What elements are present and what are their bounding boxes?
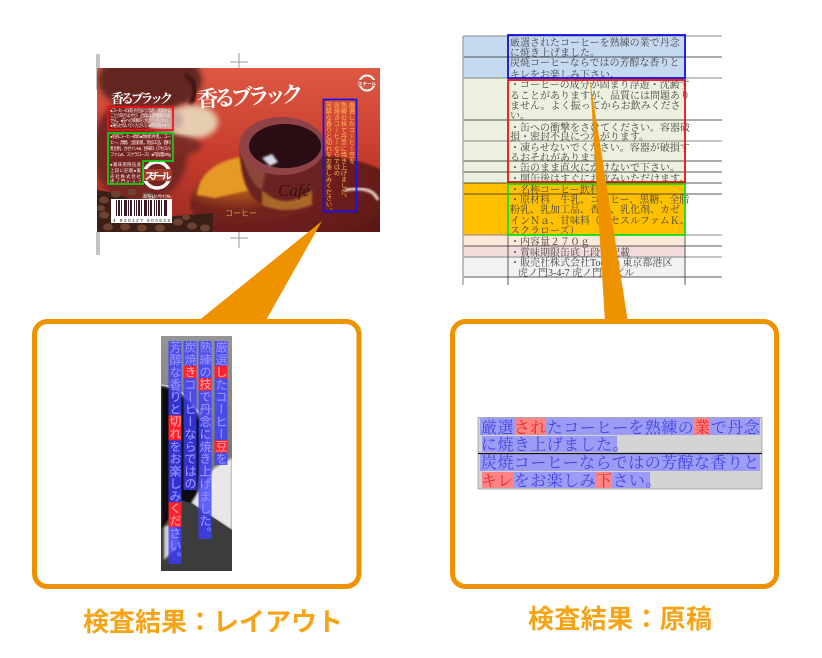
ingredients small text: ●名称コーヒー飲料●原材料 牛乳、コー: [110, 133, 171, 140]
table text: スクラローズ）: [510, 225, 580, 237]
vertical catch copy: 厳選したコーヒー豆を: [348, 101, 355, 164]
vertical catch copy: 熟練の技で丹念に焼き上げました。: [340, 101, 347, 201]
table text: ・賞味期限缶底上段に記載: [510, 246, 630, 259]
table text: ・コーヒーの成分が固まり浮遊・沈澱す: [510, 78, 690, 91]
caution small text: ●コーヒーの成分が固まり浮遊・沈澱する: [110, 107, 171, 114]
inspected text lines: [481, 419, 761, 490]
vertical inspected text: 炭焼 き コーヒーならではの: [183, 340, 197, 490]
inspected text lines: に焼き上げました。: [481, 436, 629, 454]
detection box: green: [108, 133, 173, 184]
panel: manuscript table: [463, 35, 722, 285]
table text: 損・密封不良につながります。: [510, 130, 649, 143]
arrow: callout wedge to manuscript result: [590, 80, 628, 322]
blue match highlights: [168, 341, 228, 564]
red mismatch highlights: [482, 418, 710, 488]
table text: ・販売社株式会社Toopan 東京都港区: [510, 256, 672, 269]
table text: ・名称コーヒー飲料: [510, 183, 600, 196]
table text: ることがありますが、品質には問題あり: [510, 90, 690, 102]
table text: ・内容量２７０ｇ: [510, 235, 590, 248]
table text: ません。よく振ってからお飲みくださ: [510, 99, 681, 112]
table text: ・凍らせないでください。容器が破損す: [510, 141, 690, 154]
grayscale cropped photo: [161, 336, 232, 571]
inspected text lines: キレをお楽しみ下さい。: [481, 472, 662, 490]
caution small text: せん。●缶への衝撃をさけてください。: [110, 117, 171, 124]
panel: package label artwork: [96, 53, 380, 255]
vertical catch copy: [324, 101, 355, 214]
table text: に焼き上げました。: [510, 46, 600, 59]
panel: manuscript result frame: [452, 322, 776, 586]
icon: steel recycling mark: [142, 162, 172, 200]
vertical inspected text: 芳醇な香りと 切れ をお楽しみ くだ さい。: [168, 340, 182, 564]
table text: い。: [510, 111, 530, 122]
icon: steel recycling mark: スチール: [144, 172, 172, 182]
manuscript result inset: [478, 418, 762, 490]
ingredients small text: 虎ノ門3-4-7: [110, 178, 142, 185]
vertical inspected text: 熟練の 技 で丹念に焼き上げました。: [198, 341, 212, 539]
table text: ・缶への衝撃をさけてください。容器破: [510, 121, 690, 134]
panel: layout result frame: [34, 322, 359, 586]
table text: 炭焼コーヒーならではの芳醇な香りと: [510, 56, 680, 69]
table text: ・缶のまま直火にかけないで下さい。: [510, 161, 680, 174]
table text: ・原材料 牛乳、コーヒー、黒糖、全脂: [510, 193, 689, 206]
table text: 虎ノ門3-4-7 虎ノ門○○ビル: [518, 266, 634, 279]
caution small text: ことがありますが、品質には問題ありま: [110, 112, 171, 119]
caution small text: [110, 107, 171, 129]
icon: small steel mark: [358, 76, 376, 90]
table text: 粉乳、乳加工品、香料、乳化剤、カゼ: [510, 203, 680, 216]
caption: manuscript result: 検査結果：原稿: [528, 604, 712, 634]
vertical inspected text: 厳選 し たコーヒー 豆 を: [214, 340, 228, 465]
vertical inspected text: [168, 340, 228, 564]
icon: steel recycling mark: あき缶はリサイクル: [142, 193, 172, 200]
barcode: [111, 199, 172, 223]
divider line: [478, 452, 762, 454]
barcode: 4 930127 503629: [113, 218, 170, 223]
crop marks: [98, 53, 248, 255]
vertical catch copy: 芳醇な香りと切れをお楽しみください。: [324, 101, 332, 214]
icon: small steel mark: スチール: [358, 82, 376, 88]
ingredients small text: 上段に記載●販: [110, 167, 142, 174]
label photo background: [97, 68, 380, 232]
table text: インＮａ、甘味料（アセスルファムＫ、: [510, 214, 690, 227]
detection box: blue: [324, 100, 356, 212]
ingredients small text: 売社株式会社: [110, 173, 142, 180]
red mismatch highlights: [168, 366, 228, 527]
caution small text: ●凍らせないでください。●開缶後はすぐ: [110, 122, 171, 129]
arrow: callout wedge to layout result: [197, 221, 322, 322]
ingredients small text: ●賞味期限缶底: [110, 161, 142, 168]
table row fills: [463, 36, 685, 277]
coffee label text: コーヒー: [225, 209, 257, 218]
inset background: [478, 418, 762, 489]
vertical catch copy: 炭焼きコーヒーならではの: [332, 101, 340, 177]
inspected text lines: 炭焼コーヒーならではの芳醇な香りと: [481, 454, 760, 472]
ingredients small text: [110, 133, 172, 185]
detection box: red: [108, 107, 173, 130]
caption: layout result: 検査結果：レイアウト: [83, 607, 343, 637]
small product name: 香るブラック: [111, 91, 173, 106]
blue match highlights: [480, 418, 760, 488]
ingredients small text: ファムK、スクラロース）●内容量270g: [110, 151, 172, 158]
layout result inset: [161, 336, 232, 571]
coffee beans: [97, 188, 213, 232]
main product name: 香るブラック: [196, 81, 304, 112]
ingredients small text: ヒー、黒糖、全脂粉乳、乳加工品、香料: [110, 139, 172, 146]
table text: 厳選されたコーヒーを熟練の業で丹念: [510, 36, 681, 49]
inspected text lines: 厳選されたコーヒーを熟練の業で丹念: [481, 419, 761, 437]
label photo background: Café: [278, 181, 312, 200]
detection boxes on table: [508, 35, 685, 235]
table text: キレをお楽しみ下さい。: [510, 68, 620, 81]
ingredients small text: 乳化剤、カゼインNa、甘味料（アセスル: [110, 145, 172, 152]
table text: [510, 36, 690, 279]
table text: るおそれがあります。: [510, 152, 609, 164]
table text: ・開缶後はすぐにお飲みいただけます。: [510, 172, 689, 185]
